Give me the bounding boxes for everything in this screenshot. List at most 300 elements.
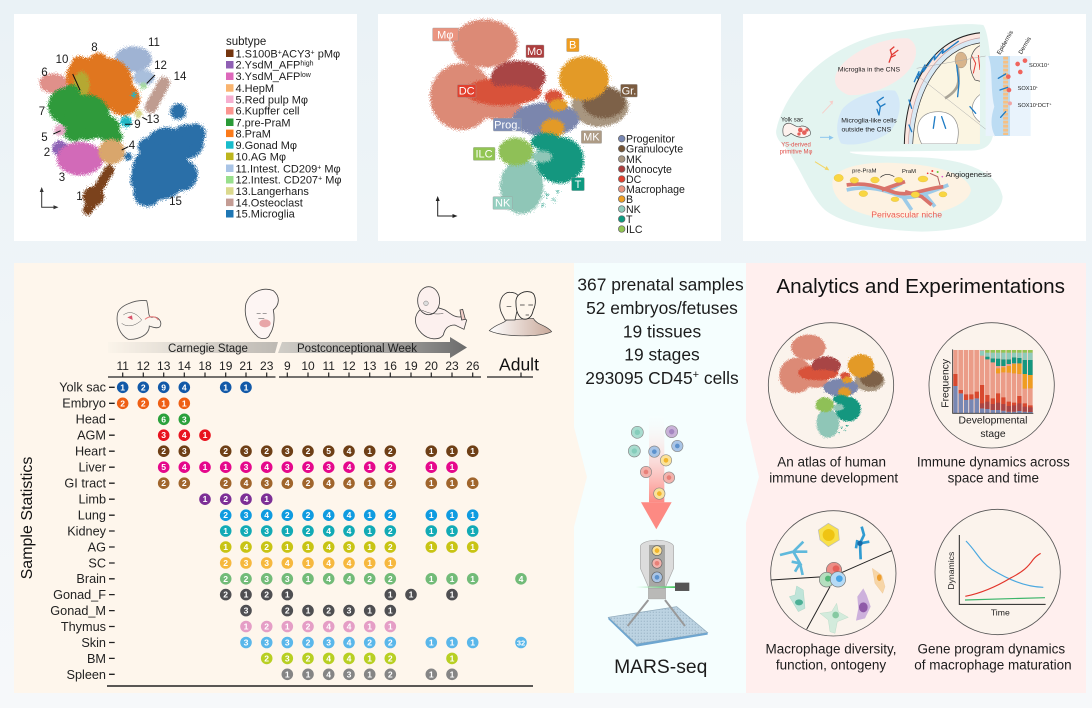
tissue labels: Thymus [61, 620, 106, 634]
bubble row: Brain: 2 [244, 574, 249, 584]
bubble row: Spleen: 1 [450, 669, 455, 679]
bubble row: Gonad_F: 2 [223, 590, 228, 600]
arrow: Postconceptional Week [278, 337, 467, 358]
tissue labels [50, 380, 115, 682]
sample summary text: cells [699, 368, 739, 388]
bubble row: Heart: 4 [347, 446, 352, 456]
caption: immune dynamics: space and time [948, 471, 1039, 486]
legend: subtype: Mφ [322, 175, 342, 187]
bubble row: Skin: 3 [326, 638, 331, 648]
bubble row: Kidney [220, 525, 479, 537]
blue region: microglia-like cells [837, 90, 900, 145]
bubble row: Gonad_M: 1 [367, 606, 372, 616]
legend: subtype: 2.YsdM_AFP [236, 60, 300, 72]
legend: lineages: Monocyte [626, 164, 672, 176]
bubble row: BM: 4 [347, 653, 352, 663]
bubble row: Limb: 1 [264, 494, 269, 504]
bubble row: SC: 4 [347, 558, 352, 568]
bubble row: Skin [240, 637, 527, 648]
heading: Analytics and Experimentations [776, 275, 1065, 298]
caption: atlas: immune development [769, 471, 898, 486]
perivascular niche: pre-PraM [852, 169, 877, 175]
bubble row: Brain: 1 [450, 574, 455, 584]
bubble row: Gonad_F: 1 [450, 590, 455, 600]
tissue labels: Brain [76, 572, 106, 586]
caption: gene program: of macrophage maturation [914, 657, 1072, 672]
bubble row: Embryo: 1 [161, 398, 166, 408]
bubble row: Gonad_M: 3 [347, 606, 352, 616]
bubble row: GI tract: 4 [285, 478, 290, 488]
bubble row: Kidney: 3 [264, 526, 269, 536]
legend: subtype: 8.PraM [236, 128, 271, 140]
axis arrows [40, 187, 58, 209]
legend: subtype: + [318, 176, 322, 183]
legend: lineages: MK [626, 154, 642, 166]
teal background shape [776, 24, 1003, 232]
bubble row: Heart: 1 [367, 446, 372, 456]
bubble row: GI tract: 4 [244, 478, 249, 488]
skin inset: Epidermis [997, 30, 1015, 56]
caption: atlas [769, 455, 898, 486]
stage axis: 23 [445, 359, 459, 373]
circle: gene program line chart [935, 509, 1060, 635]
bubble row: Brain: 2 [223, 574, 228, 584]
circle: immune dynamics stacked bars [929, 323, 1054, 448]
bubble row: Gonad_F: 1 [285, 590, 290, 600]
yolk sac: primitive Mφ [780, 150, 813, 156]
scatter: macrophage subtypes [39, 46, 206, 210]
legend: subtype: + [278, 49, 282, 56]
tissue labels: Liver [78, 460, 107, 474]
bubble row: Thymus: 2 [264, 622, 269, 632]
legend: subtype [226, 36, 342, 221]
bubble row: BM: 4 [326, 653, 331, 663]
icon: adult faces [489, 292, 552, 336]
blue region: microglia-like cells: outside the CNS [841, 126, 892, 133]
caption: atlas: An atlas of human [777, 455, 886, 470]
skin inset: SOX10 [1018, 86, 1036, 92]
stage axis: 11 [116, 359, 129, 373]
stage axis: 18 [198, 359, 212, 373]
bubble row: Spleen: 3 [347, 669, 352, 679]
bubble row: Spleen: 1 [367, 669, 372, 679]
bubble row: Liver [158, 461, 458, 473]
bubble row: Heart: 3 [244, 446, 249, 456]
bubble row: Yolk sac: 1 [223, 382, 228, 392]
bubble row: Lung: 4 [347, 510, 352, 520]
bubble row: Liver: 3 [326, 462, 331, 472]
bubble row: Gonad_M [240, 605, 396, 616]
legend: subtype: + [311, 49, 315, 56]
bubble row: AG: 1 [306, 542, 311, 552]
tissue labels: Gonad_F [53, 588, 106, 602]
bubble row: Lung: 2 [306, 510, 311, 520]
bubble row: Kidney: 4 [347, 526, 352, 536]
bubble row: Lung: 4 [264, 510, 269, 520]
bubble row: AG: 4 [326, 542, 331, 552]
bubble row: Yolk sac [117, 382, 252, 393]
bubble row: Embryo: 2 [120, 398, 125, 408]
cluster numbers and leader lines: 15 [169, 196, 182, 208]
bubble row: SC: 1 [388, 558, 393, 568]
bubble row: BM: 2 [264, 653, 269, 663]
tissue labels: Heart [75, 444, 106, 458]
bubble row: Liver: 4 [264, 462, 269, 472]
sample summary text: 19 tissues [623, 321, 701, 341]
bubble row: Heart: 3 [285, 446, 290, 456]
stage axis: Adult [499, 355, 539, 375]
bubble row: Gonad_M: 2 [285, 606, 290, 616]
bubble row: Lung: 1 [429, 510, 434, 520]
perivascular niche: Perivascular niche [871, 209, 942, 219]
stage axis: 20 [425, 359, 438, 373]
tissue labels: BM [87, 652, 106, 666]
bubble row: Brain: 4 [347, 574, 352, 584]
bubble row: Liver: 1 [223, 462, 228, 472]
bubble row: AG: 1 [285, 542, 290, 552]
bubble row: Gonad_M: 1 [388, 606, 393, 616]
tissue labels: AGM [77, 428, 106, 442]
bubble row: Lung: 3 [244, 510, 249, 520]
skin inset: Dermis [1018, 36, 1033, 56]
bubble row: Brain: 2 [388, 574, 393, 584]
tissue labels: Limb [78, 492, 106, 506]
cluster numbers and leader lines: 4 [129, 140, 136, 152]
bubble row: Liver: 2 [306, 462, 311, 472]
sample summary text: 293095 CD45 [585, 368, 693, 388]
bubble row: Kidney: 1 [367, 526, 372, 536]
skin inset: SOX10 [1029, 63, 1047, 69]
cluster tags: Mo [527, 46, 542, 58]
icon: cells [628, 426, 683, 499]
cluster tags [433, 28, 637, 210]
bubble row: Kidney: 1 [285, 526, 290, 536]
bubble row: SC: 4 [285, 558, 290, 568]
caption: gene program: Gene program dynamics [917, 641, 1065, 656]
bar: Carnegie Stage [108, 342, 278, 355]
legend: lineages: NK [626, 204, 641, 216]
bubble row: BM [261, 653, 458, 664]
cluster numbers and leader lines: 9 [134, 119, 141, 131]
legend: lineages: DC [626, 174, 642, 186]
cluster numbers and leader lines: 7 [39, 106, 45, 118]
legend: subtype: subtype [226, 36, 266, 48]
panel: analytics and experimentations [746, 263, 1086, 693]
bubble row: Head: 6 [161, 414, 166, 424]
bubble row: Lung [220, 509, 479, 521]
bubble row: GI tract: 2 [223, 478, 228, 488]
cluster numbers and leader lines: 1 [76, 191, 83, 203]
caption: macrophage diversity: Macrophage diversity, [766, 641, 896, 656]
bubble row: Spleen: 1 [306, 669, 311, 679]
tissue labels: Embryo [62, 396, 106, 410]
tissue labels: GI tract [64, 476, 106, 490]
bubble row: Spleen: 4 [326, 669, 331, 679]
bar: Carnegie Stage: Carnegie Stage [168, 343, 248, 355]
bubble row: GI tract: 4 [326, 478, 331, 488]
bubble row: Limb: 4 [244, 494, 249, 504]
bubble row: Kidney: 1 [470, 526, 475, 536]
legend: subtype: Mφ [321, 163, 341, 175]
circle: gene program line chart: Time [991, 607, 1010, 617]
sample summary text: 367 prenatal samples [577, 275, 744, 295]
bubble row: Spleen [282, 668, 458, 680]
tissue labels: Yolk sac [59, 380, 107, 394]
bubble row: Kidney: 1 [450, 526, 455, 536]
cluster numbers and leader lines: 6 [41, 67, 48, 79]
bubble row: Gonad_F: 2 [264, 590, 269, 600]
bubble row: Brain: 1 [429, 574, 434, 584]
stage axis: 11 [322, 359, 335, 373]
bubble row: Yolk sac: 2 [141, 382, 146, 392]
yolk sac: YS-derived [781, 143, 811, 149]
bubble row: Yolk sac: 9 [161, 382, 166, 392]
bubble row: GI tract: 2 [182, 478, 187, 488]
stage axis: 16 [384, 359, 397, 373]
legend: subtype: 7.pre-PraM [236, 117, 291, 129]
bubble row: Lung: 4 [326, 510, 331, 520]
legend: subtype: low [300, 72, 312, 79]
legend: subtype: high [300, 61, 314, 68]
bubble row: Heart: 2 [306, 446, 311, 456]
bubble row: Liver: 4 [347, 462, 352, 472]
bubble row: Heart: 3 [182, 446, 187, 456]
cluster tags: Mφ [437, 29, 453, 41]
sample summary text: 52 embryos/fetuses [586, 298, 738, 318]
legend: subtype: 4.HepM [236, 83, 274, 95]
bubble row: Limb: 2 [223, 494, 228, 504]
bubble row: Head [158, 414, 190, 425]
bubble row: GI tract: 2 [388, 478, 393, 488]
bubble row: Embryo [117, 398, 190, 409]
cluster tags: B [569, 40, 576, 52]
bubble row: Yolk sac: 1 [120, 382, 125, 392]
bubble row: Skin: 32 [517, 638, 525, 648]
panel: sample statistics [14, 263, 587, 693]
legend: lineages: T [626, 214, 633, 226]
circle: immune dynamics stacked bars: stage [980, 429, 1006, 440]
circle: macrophage diversity [771, 511, 896, 636]
stage axis: 12 [342, 359, 356, 373]
stage axis: 19 [219, 359, 233, 373]
yolk sac: Yolk sac [781, 118, 803, 124]
bubble row: AG: 1 [450, 542, 455, 552]
bubble row: Heart: 5 [326, 446, 331, 456]
bubble row: Skin: 2 [388, 638, 393, 648]
cluster numbers and leader lines: 8 [91, 42, 98, 54]
stage axis: 23 [260, 359, 274, 373]
bubble row: BM: 2 [388, 653, 393, 663]
circle: atlas [768, 323, 894, 448]
bubble row: Skin: 1 [429, 638, 434, 648]
bubble row: Thymus: 2 [306, 622, 311, 632]
bubble row: Kidney: 1 [429, 526, 434, 536]
stage axis: 19 [404, 359, 418, 373]
bubble row: GI tract: 3 [264, 478, 269, 488]
bubble row: Liver: 3 [244, 462, 249, 472]
icon: embryo late [245, 289, 278, 339]
caption: macrophage diversity: function, ontogeny [776, 657, 886, 672]
legend: subtype: 13.Langerhans [236, 186, 309, 198]
bubble row: Heart: 2 [223, 446, 228, 456]
axis arrows [436, 196, 458, 218]
bubble row: GI tract: 1 [470, 478, 475, 488]
circle: immune dynamics stacked bars: Developmental [959, 415, 1027, 426]
skin inset [917, 30, 1051, 136]
bubble row: Liver: 1 [450, 462, 455, 472]
bubble row: Thymus: 1 [285, 622, 290, 632]
bubble row: SC: 1 [306, 558, 311, 568]
legend: subtype: 12.Intest. CD207 [236, 175, 318, 187]
tissue labels: Head [76, 412, 106, 426]
bubble row: GI tract: 2 [161, 478, 166, 488]
tissue labels: Spleen [66, 668, 106, 682]
perivascular niche: PraM [902, 169, 916, 175]
tissue labels: SC [88, 556, 106, 570]
bubble row: Liver: 1 [429, 462, 434, 472]
bubble row: Brain: 4 [326, 574, 331, 584]
bubble row: GI tract: 2 [306, 478, 311, 488]
tissue labels: AG [88, 540, 106, 554]
cluster numbers and leader lines: 10 [56, 54, 68, 66]
bubble row: GI tract [158, 477, 479, 489]
bubble row: GI tract: 1 [367, 478, 372, 488]
bubble row: SC: 4 [326, 558, 331, 568]
label: MARS-seq: MARS-seq [614, 657, 707, 678]
bubble row: Skin: 3 [285, 638, 290, 648]
bubble row: Lung: 1 [450, 510, 455, 520]
bubble row: Brain: 4 [519, 574, 524, 584]
pink region: microglia in CNS [835, 38, 916, 95]
perivascular niche [832, 163, 992, 219]
bubble row: Skin: 3 [244, 638, 249, 648]
bubble row: SC: 2 [223, 558, 228, 568]
legend: subtype: 3.YsdM_AFP [236, 71, 300, 83]
bubble row: BM: 2 [306, 653, 311, 663]
bubble row: Embryo: 2 [141, 398, 146, 408]
bubble row: Gonad_F: 1 [409, 590, 414, 600]
legend: lineages: Macrophage [626, 184, 685, 196]
stage axis: 21 [239, 359, 253, 373]
bubble row: Skin: 2 [306, 638, 311, 648]
bubble row: Limb [199, 493, 273, 505]
bubble row: Heart: 1 [429, 446, 434, 456]
bubble row: AG: 4 [244, 542, 249, 552]
cluster tags: MK [583, 132, 600, 144]
bubble row: GI tract: 1 [429, 478, 434, 488]
bubble row: SC: 3 [244, 558, 249, 568]
skin inset: SOX10 [1018, 103, 1036, 109]
bubble row: Liver: 2 [388, 462, 393, 472]
panel: macrophage niches schematic [743, 14, 1086, 241]
bubble row: Kidney: 2 [306, 526, 311, 536]
bubble row: Yolk sac: 1 [244, 382, 249, 392]
skin inset: + [1047, 62, 1049, 66]
bubble row: Heart [158, 445, 479, 457]
bubble row: Gonad_F: 1 [388, 590, 393, 600]
bubble row: AG: 1 [367, 542, 372, 552]
legend: subtype: 15.Microglia [236, 209, 296, 221]
bubble row: AGM [158, 429, 211, 441]
bubble row: Brain: 3 [285, 574, 290, 584]
bubble row: Skin: 4 [347, 638, 352, 648]
tissue labels: Skin [81, 636, 106, 650]
cluster tags: ILC [475, 149, 493, 161]
legend: lineages [618, 134, 685, 236]
bubble row: Thymus: 1 [367, 622, 372, 632]
bubble row: Heart: 2 [161, 446, 166, 456]
cluster numbers and leader lines: 14 [174, 71, 187, 83]
bubble row: SC: 3 [264, 558, 269, 568]
bubble row: Yolk sac: 4 [182, 382, 187, 392]
caption: immune dynamics [917, 455, 1070, 486]
bubble row: BM: 1 [367, 653, 372, 663]
cluster numbers and leader lines: 5 [41, 132, 48, 144]
legend: lineages: Progenitor [626, 134, 675, 146]
legend: lineages: ILC [626, 224, 643, 236]
bubble row: Lung: 2 [285, 510, 290, 520]
bubble row: Gonad_M: 1 [306, 606, 311, 616]
bubble row: AG: 2 [264, 542, 269, 552]
bubble row: BM: 3 [285, 653, 290, 663]
bubble row: Thymus: 1 [388, 622, 393, 632]
legend: subtype: 9.Gonad Mφ [236, 140, 297, 152]
legend: lineages: B [626, 194, 633, 206]
bubble row: Gonad_M: 3 [244, 606, 249, 616]
cluster numbers and leader lines: 3 [59, 172, 65, 184]
blue region: microglia-like cells: Microglia-like cells [841, 118, 897, 125]
bubble row: AGM: 3 [161, 430, 166, 440]
bubble row: GI tract: 1 [450, 478, 455, 488]
arrow: cells to sequencing [641, 412, 672, 529]
bubble row: AG: 1 [470, 542, 475, 552]
bottom axis [107, 685, 533, 687]
cluster tags: T [575, 179, 582, 191]
sample summary text [577, 275, 744, 388]
perivascular niche: Angiogenesis [946, 170, 992, 179]
bubble row: Liver: 4 [182, 462, 187, 472]
bubble row: Spleen: 2 [388, 669, 393, 679]
icon: embryo early [117, 300, 161, 339]
bubble row: GI tract: 4 [347, 478, 352, 488]
bubble row: Kidney: 1 [223, 526, 228, 536]
pink region: microglia in CNS: Microglia in the CNS [838, 66, 901, 73]
bubble row: AG: 3 [347, 542, 352, 552]
bubble row: Liver: 5 [161, 462, 166, 472]
sample summary text: 19 stages [624, 345, 700, 365]
bubble row: AG [220, 541, 479, 553]
legend: subtype: 1.S100B [236, 48, 278, 60]
bubble row: AG: 1 [429, 542, 434, 552]
brain cross section [904, 33, 982, 145]
bubble row: Brain [220, 573, 527, 585]
cluster tags: Gr. [622, 85, 636, 97]
bubble row: Skin: 2 [367, 638, 372, 648]
arrow: Postconceptional Week: Postconceptional Week [297, 343, 417, 355]
stage axis: 13 [363, 359, 377, 373]
stage axis: 12 [137, 359, 150, 373]
bubble row: Heart: 2 [388, 446, 393, 456]
stage axis [108, 355, 539, 377]
stage axis: 14 [178, 359, 191, 373]
cluster tags: NK [495, 198, 511, 210]
bubble row: AGM: 4 [182, 430, 187, 440]
bubble row: Gonad_F: 1 [244, 590, 249, 600]
bubble row: Kidney: 2 [388, 526, 393, 536]
cluster numbers and leader lines: 12 [154, 60, 167, 72]
bubble row: Kidney: 4 [326, 526, 331, 536]
bubble row: SC: 1 [367, 558, 372, 568]
